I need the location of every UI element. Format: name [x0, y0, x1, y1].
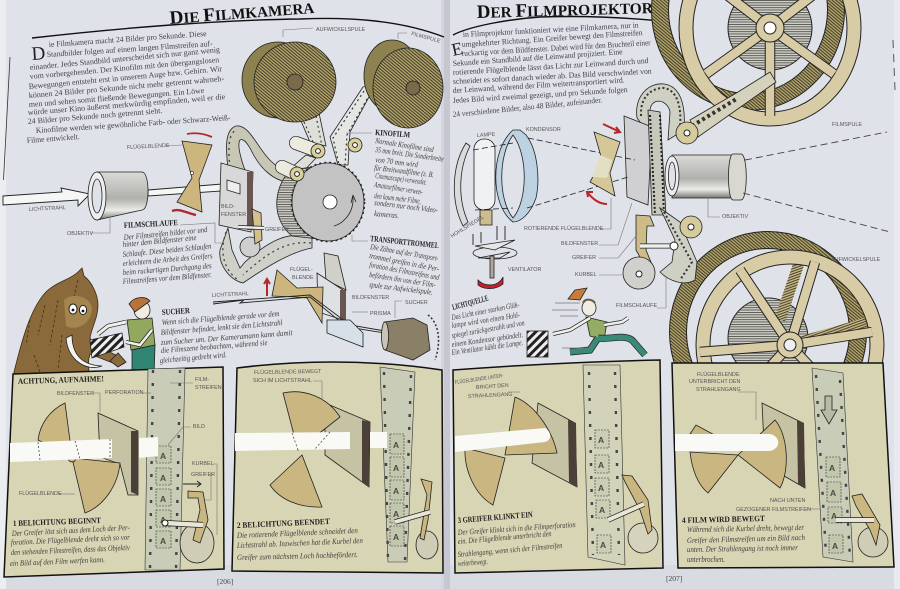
gate plate — [219, 163, 253, 232]
panel 2: Belichtung beendet — [232, 362, 443, 573]
callout: Sucher: Wenn sich die Flügelblende gerade vor dem — [161, 309, 280, 327]
film to take-up and supply reels — [291, 84, 376, 175]
page numbers — [217, 574, 682, 586]
icon: top film reel (Filmspule) — [660, 0, 854, 119]
film strip: A — [393, 509, 399, 519]
labels: camera gate and greifer: BILD- — [221, 204, 235, 210]
labels: projector left: LAMPE — [477, 132, 496, 139]
labels: FLÜGELBLENDE BEWEGT — [254, 368, 322, 376]
caption: Lichtstrahl ab. Inzwischen hat die Kurbel den — [236, 536, 363, 550]
labels — [689, 371, 820, 513]
text block: intro camera: Filme entwickelt. — [26, 132, 80, 145]
caption — [10, 516, 131, 568]
labels: projector right side: AUFWICKELSPULE — [831, 257, 881, 263]
heading: ACHTUNG, AUFNAHME! — [18, 374, 104, 386]
labels: projector right side: OBJEKTIV — [722, 214, 748, 220]
film strip and plate — [317, 253, 346, 320]
labels: projector right side — [708, 122, 881, 263]
labels: SUCHER — [405, 300, 428, 306]
upper chain loop — [637, 84, 684, 140]
text block: intro projector: rotierende Flügelblende lässt das Licht zur Leinwand durch und — [453, 56, 649, 77]
film strip: A — [831, 511, 837, 521]
dashed projected beam — [743, 132, 890, 232]
labels: BILDFENSTER — [352, 295, 389, 301]
labels: projector left: HOHLSPIEGEL — [450, 214, 485, 240]
icon: take-up reel — [242, 42, 336, 122]
icon: objective lens — [88, 172, 148, 220]
title: Die Filmkamera — [32, 0, 444, 38]
callout: Filmschlaufe: FILMSCHLAUFE — [124, 218, 178, 230]
film lower loop — [220, 228, 312, 283]
callout: Transporttrommel: Die Zähne auf der Transport- — [369, 242, 439, 263]
text block: intro projector: umgekehrter Richtung. Ein Greifer bewegt den Filmstreifen — [462, 28, 643, 49]
caption: weiterbewegt. — [458, 557, 488, 568]
labels: lichtstrahl and objektiv: OBJEKTIV — [67, 231, 93, 237]
icon: camera shutter blade — [172, 133, 212, 215]
panel 4: Film wird bewegt — [672, 363, 894, 568]
shutter blade — [38, 403, 120, 513]
plate — [624, 116, 652, 205]
labels: LICHTSTRAHL — [212, 291, 249, 299]
film strip: A — [393, 532, 399, 542]
shutter blade — [270, 392, 340, 507]
callout: Sucher: Bildfenster befindet, lenkt sie den Lichtstrahl — [160, 318, 283, 337]
text block: intro camera — [26, 29, 231, 145]
labels: FLÜGELBLENDE — [697, 371, 740, 378]
film strip: A — [598, 483, 604, 493]
labels: SICH IM LICHTSTRAHL — [253, 378, 312, 384]
text block: intro camera: Bewegungen entsteht erst in unserem Auge bzw. Gehirn. Wir — [28, 64, 223, 91]
claw mechanism — [836, 494, 888, 557]
film strip: A — [832, 541, 838, 551]
title: Der Filmprojektor: DER FILMPROJEKTOR — [477, 0, 654, 23]
labels: BRICHT DEN — [476, 383, 509, 391]
film strip: A — [393, 440, 399, 450]
text block: intro camera: 24 Bilder pro Sekunde noch getrennt sieht. — [27, 106, 163, 126]
callout: Kinofilm: Normale Kinofilme sind — [374, 136, 435, 154]
icon: supply reel — [364, 40, 443, 128]
callout: Kinofilm: sondern nur noch Video- — [374, 198, 439, 215]
film strip: A — [600, 540, 606, 550]
callout: Filmschlaufe: erleichtern die Arbeit des Greifers — [122, 251, 213, 268]
caption: Greifer zum nächsten Loch hochbefördert. — [237, 550, 358, 562]
eyepiece — [382, 315, 439, 360]
caption: unten. Der Strahlengang ist noch immer — [687, 543, 799, 554]
labels: STREIFEN — [195, 385, 222, 391]
text block: intro projector — [450, 20, 652, 119]
icon: ventilator — [473, 226, 517, 289]
film strip: A — [829, 463, 835, 473]
rollers — [282, 138, 362, 181]
labels: KURBEL — [192, 461, 214, 467]
caption: Greifer den Filmstreifen um ein Bild nach — [687, 533, 805, 545]
aperture plate — [532, 403, 577, 487]
lower chain loop — [660, 208, 697, 283]
icon: cameraman with clapperboard — [90, 298, 155, 376]
projector film path — [623, 72, 776, 289]
text block: intro camera: können 24 Bilder pro Sekunde nicht mehr getrennt wahrneh- — [28, 74, 225, 100]
transport drum — [277, 162, 364, 242]
callout: Sucher: SUCHER — [162, 306, 190, 317]
caption: Während sich die Kurbel dreht, bewegt der — [687, 523, 805, 534]
callout: Transporttrommel: trommel greifen in die Per- — [369, 251, 440, 274]
light beam — [10, 437, 158, 462]
callout: Lichtquelle: spiegel zurückgestrahlt und von — [451, 318, 525, 340]
claw mechanism — [162, 481, 214, 563]
film strip: A — [160, 473, 166, 483]
labels: NACH UNTEN — [770, 498, 805, 504]
text block: intro projector: 24 verschiedene Bilder, also 48 Bilder, aufeinander. — [452, 95, 602, 119]
label: fluegelblende: FLÜGELBLENDE — [127, 142, 170, 151]
title: Die Filmkamera: DIE FILMKAMERA — [169, 0, 315, 29]
callout: Kinofilm: 35 mm breit. Die Sonderbreite — [374, 145, 445, 164]
text block: intro projector: in Filmprojektor funktioniert wie eine Filmkamera, nur in — [463, 20, 639, 39]
labels: FILM- — [195, 377, 209, 383]
icon: mammoth — [14, 268, 125, 376]
labels: projector left: VENTILATOR — [508, 267, 541, 273]
icon: lamp house — [454, 130, 635, 226]
caption — [682, 514, 805, 564]
claw mechanism — [608, 475, 658, 553]
reflector — [454, 143, 470, 226]
light beam — [235, 432, 387, 451]
lamp — [474, 139, 495, 225]
callout: Lichtquelle: einem Kondensor gebündelt. — [451, 330, 524, 349]
light beam — [675, 434, 778, 451]
film strip: A — [830, 488, 836, 498]
callout: Filmschlaufe: hinter dem Bildfenster eine — [122, 233, 197, 249]
claw mechanism — [395, 479, 438, 559]
callout: Filmschlaufe: Filmstreifens vor dem Bildfenster. — [122, 270, 212, 286]
labels: reels: FILMSPULE — [410, 31, 441, 45]
film strip: A — [393, 463, 399, 473]
claw and crank — [623, 215, 678, 289]
icon: projector objective — [665, 154, 746, 200]
film strip: A — [598, 460, 604, 470]
page numbers: [207] — [666, 574, 682, 583]
callout: Filmschlaufe: Schlaufe. Diese beiden Schlaufen — [122, 242, 212, 259]
labels: UNTERBRICHT DEN — [689, 379, 741, 385]
labels: projector left: KONDENSOR — [526, 127, 561, 133]
labels: lichtstrahl and objektiv: LICHTSTRAHL — [29, 205, 66, 213]
labels: camera gate and greifer — [221, 204, 289, 233]
labels: BILD — [193, 424, 205, 430]
text block: intro projector: der Leinwand, während der Film weitertransportiert wird. — [453, 76, 625, 95]
aperture plate — [98, 413, 138, 495]
callout: Filmschlaufe — [122, 218, 223, 286]
labels: FLÜGEL- — [290, 266, 313, 273]
callout: Kinofilm: von 70 mm wird — [375, 155, 419, 169]
text block: intro camera: men und sehen somit fließende Bewegungen. Ein Löwe — [28, 86, 205, 109]
film strip — [380, 367, 415, 562]
text block: intro camera: einander. Jedes Standbild unterscheidet sich nur ganz wenig — [29, 45, 220, 72]
labels: PERFORATION — [105, 390, 144, 396]
labels: projector left — [450, 127, 666, 309]
text block: intro projector: Jedes Bild wird zweimal gezeigt, und pro Sekunde folgen — [453, 85, 628, 105]
caption — [457, 510, 576, 568]
film strip: A — [160, 451, 166, 461]
caption — [236, 517, 363, 562]
labels: reels — [283, 27, 441, 45]
light beam through camera objective — [3, 184, 222, 206]
labels: reels: AUFWICKELSPULE — [316, 27, 366, 33]
labels: PRISMA — [370, 311, 391, 317]
caption: den stehenden Filmstreifen, dass das Objektiv — [11, 543, 130, 557]
camera film path with drum, rollers and gate — [219, 84, 376, 283]
caption: Der Greifer klinkt sich in die Filmperforation — [457, 520, 576, 537]
labels: GEZOGENER FILMSTREIFEN — [736, 507, 811, 513]
labels: BLENDE — [292, 275, 314, 281]
callout: Sucher: zum Sucher um. Der Kameramann kann damit — [160, 328, 293, 347]
panel 3: Greifer klinkt ein — [453, 360, 663, 573]
callout: Transporttrommel: befördern ihn von der Film- — [369, 270, 437, 289]
film loop above gate — [226, 126, 292, 182]
callout: Kinofilm: kameras. — [374, 209, 400, 220]
aperture plate — [325, 403, 370, 487]
blade — [264, 270, 323, 323]
film from top reel — [690, 72, 776, 137]
text block: intro projector: schneidet es sofort danach wieder ab. Das Bild verschwindet von — [453, 67, 652, 86]
light rays — [473, 138, 635, 210]
callout: Sucher — [159, 306, 293, 365]
callout: Transporttrommel: spule zur Aufwickelspule. — [369, 280, 433, 297]
labels: projector left: KURBEL — [575, 272, 597, 278]
callout: Filmschlaufe: beim ruckartigen Durchgang des — [122, 261, 212, 277]
light beam — [455, 428, 550, 452]
text block: intro camera: ie Filmkamera macht 24 Bilder pro Sekunde. Diese — [49, 29, 207, 49]
text block: intro camera: würde unser Kino äußerst merkwürdig empfinden, weil er die — [27, 92, 226, 117]
caption: unterbrochen. — [687, 555, 725, 564]
callout: Lichtquelle: LICHTQUELLE — [451, 294, 490, 312]
text block: intro camera: Kinofilme werden wie gewöhnliche Farb- oder Schwarz-Weiß- — [36, 113, 231, 135]
labels: projector left: ROTIERENDE FLÜGELBLENDE — [524, 225, 604, 232]
beam — [213, 295, 385, 333]
labels: lichtstrahl and objektiv — [29, 205, 110, 237]
callout: Kinofilm: den kaum mehr Filme, — [374, 191, 422, 206]
caption: 4 FILM WIRD BEWEGT — [682, 514, 766, 525]
film column — [648, 110, 666, 215]
labels: projector left: BILDFENSTER — [561, 241, 598, 247]
labels — [19, 377, 222, 535]
text block: intro camera: D — [31, 43, 46, 65]
viewfinder diagram — [212, 253, 439, 360]
film strip — [583, 365, 625, 565]
caption: foration. Die Flügelblende dreht sich so vor — [11, 533, 131, 547]
text block: intro projector: E — [450, 38, 465, 60]
aperture plate — [762, 403, 805, 488]
text block: intro projector: Sekunde ein Standbild auf die Leinwand projiziert. Eine — [453, 47, 623, 68]
film strip — [145, 368, 185, 570]
caption: 3 GREIFER KLINKT EIN — [457, 510, 533, 525]
film strip: A — [160, 494, 166, 504]
condenser — [496, 130, 538, 222]
caption: ein. Die Flügelblende unterbricht den — [457, 529, 552, 546]
callout: Kinofilm: KINOFILM — [375, 128, 411, 139]
caption: 2 BELICHTUNG BEENDET — [237, 517, 330, 530]
film strip: A — [160, 515, 166, 525]
film strip: A — [599, 505, 605, 515]
panel 1: Belichtung beginnt — [4, 367, 224, 577]
film strip: A — [393, 486, 399, 496]
title: Der Filmprojektor — [453, 0, 660, 35]
labels: BILDFENSTER — [57, 391, 94, 397]
icon: running man with box — [527, 288, 645, 357]
callout: Kinofilm: für Breitwandfilme (z. B. — [374, 163, 434, 179]
callout: Transporttrommel: foration des Filmstreifens und — [369, 260, 441, 282]
greifer mechanism — [238, 209, 264, 257]
text block: intro projector: ruckartig vor dem Bildfenster. Dabei wird für den Bruchteil einer — [462, 38, 651, 58]
icon: projector shutter — [587, 124, 620, 204]
film strip: A — [160, 536, 166, 546]
caption: Der Greifer löst sich aus dem Loch der Per- — [11, 523, 130, 538]
labels: camera gate and greifer: GREIFER — [265, 227, 289, 233]
labels — [253, 368, 322, 400]
caption: 1 BELICHTUNG BEGINNT — [13, 516, 101, 528]
callout: Kinofilm: Cinemascope) verwendet. — [375, 171, 427, 187]
text block: intro camera: Standbilder folgen auf einem langen Filmstreifen auf- — [47, 39, 213, 59]
callout: Sucher: die Filmszene beobachten, während sie — [160, 338, 268, 355]
film strip: A — [598, 435, 604, 445]
callout: Transporttrommel — [352, 234, 441, 297]
callout: Kinofilm: Amateurfilmer verwen- — [373, 180, 424, 197]
rollers — [676, 122, 702, 238]
film strip — [812, 368, 853, 562]
labels: FLÜGELBLENDE UNTER- — [454, 372, 504, 386]
icon: take-up reel (Aufwickelspule) — [678, 240, 877, 433]
labels: STRAHLENGANG — [696, 387, 741, 393]
labels: camera gate and greifer: FENSTER — [221, 212, 246, 218]
labels: GREIFER — [191, 472, 215, 478]
label: fluegelblende — [127, 142, 182, 151]
labels: projector right side: FILMSPULE — [832, 122, 862, 128]
callout: Transporttrommel: TRANSPORTTROMMEL — [370, 234, 440, 250]
labels: projector left: FILMSCHLAUFE — [616, 303, 657, 309]
labels: projector left: GREIFER — [572, 255, 596, 261]
caption: Die rotierende Flügelblende schneidet den — [236, 526, 358, 540]
prism — [327, 320, 363, 347]
callout: Kinofilm — [346, 128, 445, 220]
labels: STRAHLENGANG — [468, 392, 513, 400]
callout: Lichtquelle: lampe wird von einem Hohl- — [451, 310, 521, 330]
shutter blade — [465, 397, 557, 505]
text block: intro camera: vom vorhergehenden. Der Kinofilm mit den übergangslosen — [29, 55, 219, 81]
labels — [454, 372, 520, 400]
callout: Filmschlaufe: Der Filmstreifen bildet vor und — [122, 225, 209, 242]
callout: Lichtquelle: Ein Ventilator kühlt die Lampe. — [450, 338, 524, 357]
caption: Strahlengang, wenn sich der Filmstreifen — [457, 541, 563, 559]
labels — [212, 266, 428, 318]
caption: ein Bild auf den Film werfen kann. — [10, 555, 105, 568]
callout: Lichtquelle — [450, 294, 525, 357]
page numbers: [206] — [217, 577, 233, 586]
callout: Lichtquelle: Das Licht einer starken Glüh- — [450, 300, 520, 322]
labels: FLÜGELBLENDE — [19, 490, 62, 497]
shutter blade — [690, 420, 786, 493]
callout: Sucher: gleichzeitig gedreht wird. — [159, 350, 227, 365]
